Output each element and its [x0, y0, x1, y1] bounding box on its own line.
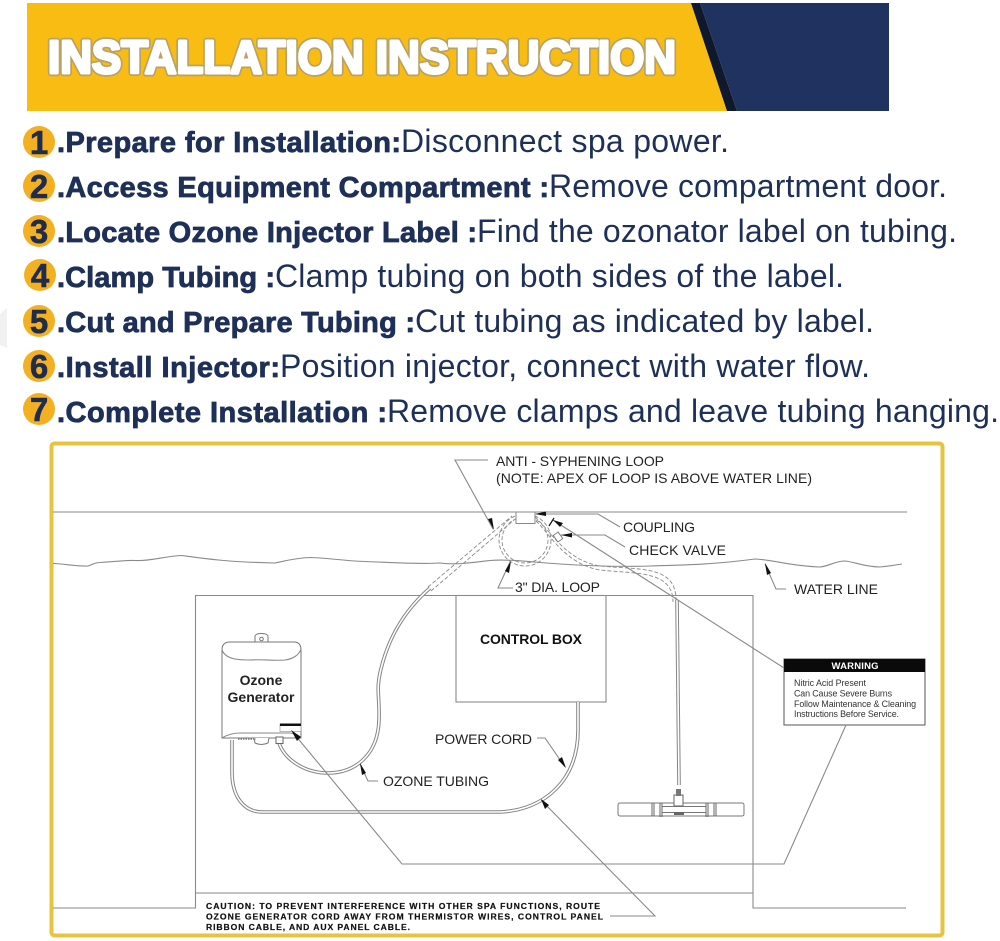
label: anti-siphoning loop: ANTI - SYPHENING LOOP	[496, 453, 664, 469]
label: check valve: CHECK VALVE	[629, 542, 726, 558]
label: water line	[765, 563, 878, 597]
step 7: 7	[30, 391, 48, 428]
diagram panel	[52, 444, 942, 936]
step 3: .Locate Ozone Injector Label :	[57, 217, 477, 249]
step 5	[23, 303, 874, 340]
warning label: Can Cause Severe Burns	[794, 688, 893, 698]
label: coupling: COUPLING	[623, 519, 695, 535]
ozone generator: Ozone	[240, 672, 283, 688]
control box: CONTROL BOX	[480, 631, 583, 647]
step 6: Position injector, connect with water flow.	[280, 348, 870, 384]
injector	[618, 789, 744, 817]
label: anti-siphoning loop: (NOTE: APEX OF LOOP IS ABOVE WATER LINE)	[496, 470, 812, 486]
warning leader lines	[291, 518, 846, 864]
label: ozone tubing: OZONE TUBING	[383, 773, 489, 789]
label: power cord: POWER CORD	[435, 731, 532, 747]
header banner	[27, 3, 889, 111]
ozone tubing	[279, 516, 514, 773]
step 2	[23, 168, 947, 205]
warning label: WARNING	[832, 661, 878, 672]
label: water line: WATER LINE	[794, 581, 878, 597]
warning label: Follow Maintenance & Cleaning	[794, 699, 916, 709]
label: anti-siphoning loop	[455, 453, 812, 530]
caution note	[206, 901, 603, 932]
step 3: Find the ozonator label on tubing.	[477, 213, 957, 249]
title: INSTALLATION INSTRUCTION	[48, 31, 676, 83]
caution note: OZONE GENERATOR CORD AWAY FROM THERMISTOR WIRES, CONTROL PANEL	[206, 912, 603, 922]
step 5: .Cut and Prepare Tubing :	[57, 307, 415, 339]
caution note: CAUTION: TO PREVENT INTERFERENCE WITH OTHER SPA FUNCTIONS, ROUTE	[206, 901, 600, 911]
warning label: Nitric Acid Present	[794, 678, 867, 688]
step 4: 4	[31, 257, 50, 294]
anti-siphon loop	[499, 512, 551, 566]
step 1	[23, 123, 729, 161]
step 6	[23, 348, 870, 385]
step 5: Cut tubing as indicated by label.	[415, 303, 874, 339]
warning label	[784, 659, 925, 725]
title: INSTALLATION INSTRUCTION	[48, 31, 676, 83]
step 1: .Prepare for Installation:	[57, 127, 401, 159]
label: 3 inch loop	[498, 561, 600, 595]
label: 3 inch loop: 3" DIA. LOOP	[515, 579, 600, 595]
caution leader	[541, 799, 655, 916]
step 2: .Access Equipment Compartment :	[57, 172, 549, 204]
step 4: .Clamp Tubing :	[57, 262, 275, 294]
caution note: RIBBON CABLE, AND AUX PANEL CABLE.	[206, 922, 410, 932]
step 1: Disconnect spa power.	[401, 123, 729, 159]
step 2: 2	[30, 168, 48, 205]
ozone generator	[222, 634, 301, 744]
warning label: Instructions Before Service.	[794, 709, 899, 719]
label: check valve	[561, 533, 726, 558]
step 6: 6	[30, 348, 48, 385]
ozone generator: Generator	[228, 689, 295, 705]
label: coupling	[535, 512, 695, 535]
step 3: 3	[30, 213, 48, 250]
step 6: .Install Injector:	[57, 352, 280, 384]
step 4	[24, 257, 844, 294]
label: power cord	[435, 731, 566, 768]
step 5: 5	[30, 303, 48, 340]
step 7	[23, 391, 999, 429]
control box	[456, 596, 606, 702]
step 7: Remove clamps and leave tubing hanging.	[387, 393, 999, 429]
power cord tube	[232, 702, 578, 812]
tube to injector	[535, 517, 679, 785]
label: ozone tubing	[360, 763, 489, 789]
step 4: Clamp tubing on both sides of the label.	[275, 258, 844, 294]
step 7: .Complete Installation :	[57, 397, 387, 429]
step 1: 1	[30, 124, 48, 161]
step 3	[23, 213, 957, 250]
step 2: Remove compartment door.	[549, 168, 947, 204]
